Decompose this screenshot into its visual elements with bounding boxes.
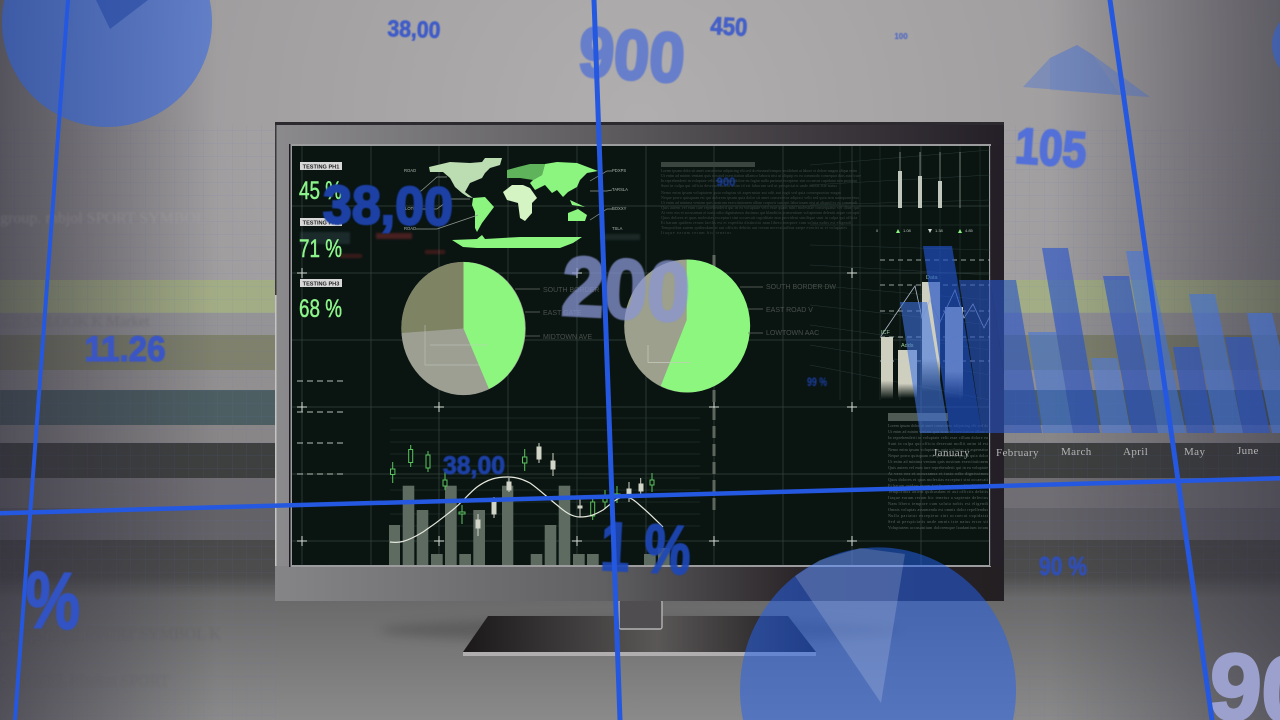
map leader lines xyxy=(416,171,612,229)
text block bottom right: Voluptatem accusantium doloremque laudantium totam xyxy=(888,525,989,530)
right pie leaders and labels: SOUTH BORDER DW xyxy=(766,284,836,291)
floating numbers overlay xyxy=(24,12,1088,646)
number 100 small: 100 xyxy=(894,32,908,41)
testing label 2 xyxy=(300,218,342,226)
text block bottom right: Ut enim ad minim veniam quis nostrud exercitation ullamco xyxy=(888,429,988,434)
overlay month labels: January xyxy=(933,447,970,459)
screen xyxy=(291,145,990,566)
monitor xyxy=(275,122,1004,601)
background floor xyxy=(0,540,1280,720)
top right circle overlay xyxy=(1272,7,1280,83)
testing label 3: TESTING PH3 xyxy=(303,282,339,288)
testing label 2: TESTING PH2 xyxy=(303,220,339,226)
small 900 on screen: 900 xyxy=(716,175,736,189)
candles xyxy=(390,445,654,524)
floor shadow xyxy=(380,618,900,642)
monitor bar chart: Adds xyxy=(901,343,914,349)
faint background text: group. mbjol SPORT SYMBOL xyxy=(0,210,206,227)
gauge legend xyxy=(876,228,974,233)
number 90 percent: 90 % xyxy=(1039,551,1087,581)
text block top: Et harum quidem rerum facilis est et expedita distinctio nam libero tempore cum soluta nobis est eligendi xyxy=(661,220,852,225)
number 105: 105 xyxy=(1014,118,1088,178)
map labels: LOTO xyxy=(405,187,417,192)
overlay month labels: February xyxy=(996,447,1039,459)
background wall xyxy=(0,0,1280,545)
overlay month labels xyxy=(933,445,1259,459)
right pie leaders and labels: EAST ROAD V xyxy=(766,307,813,314)
background data stripes xyxy=(0,280,1280,540)
Antarctica xyxy=(452,235,582,248)
left pie leaders and labels: MIDTOWN AVE xyxy=(543,334,592,341)
small vertical gauges xyxy=(876,152,974,233)
percent 71: 71 % xyxy=(299,235,342,263)
overlay month labels: April xyxy=(1123,446,1148,458)
text block bottom right xyxy=(888,413,989,530)
number 1 percent: 1 % xyxy=(599,508,693,589)
text block bottom right: Neque porro quisquam est qui dolorem ipsum quia dolor xyxy=(888,453,989,458)
trend curve xyxy=(390,477,663,542)
number 11.26: 11.26 xyxy=(84,330,166,369)
gauge legend: 1.08 xyxy=(903,228,912,233)
world map xyxy=(404,158,628,248)
text block top: Sunt in culpa qui officia deserunt mollit anim id est laborum sed ut perspiciatis unde omnis iste natus xyxy=(661,183,837,188)
number 450: 450 xyxy=(710,12,748,42)
candlestick and volume chart xyxy=(389,443,670,565)
right pie leaders and labels: LOWTOWN AAC xyxy=(766,330,819,337)
bottom pie overlay xyxy=(740,547,1016,720)
left pie leaders and labels xyxy=(515,287,599,341)
small 99 percent on screen: 99 % xyxy=(807,375,827,389)
map labels: BOXXY xyxy=(612,206,627,211)
text block bottom right: Ut enim ad minima veniam quis nostrum exercitationem xyxy=(888,459,989,464)
text block bottom right: Quis autem vel eum iure reprehenderit qui in ea voluptate xyxy=(888,465,988,470)
map labels: TARSLA xyxy=(612,187,628,192)
percent 45: 45 % xyxy=(299,177,342,205)
monitor neck xyxy=(619,600,662,629)
text block top: Itaque earum rerum hic tenetur xyxy=(661,230,732,235)
panel: testing percentages xyxy=(299,162,342,323)
faint background text: group. mbjol SPORT SYMBOL K xyxy=(0,626,221,643)
monitor stand xyxy=(380,600,900,656)
text block bottom right: Nam libero tempore cum soluta nobis est eligendi xyxy=(888,501,989,506)
gauge legend: 1.38 xyxy=(935,228,944,233)
overlay month labels: May xyxy=(1184,446,1205,458)
faint background text: SYMBOL Market SPORT xyxy=(0,673,169,690)
North America xyxy=(429,158,502,198)
text block top: Quos dolores et quas molestias excepturi sint occaecati cupiditate non provident similique sunt in culpa qui officia xyxy=(661,215,857,220)
monitor right side darkening xyxy=(990,146,1004,566)
map labels: ROAD xyxy=(404,168,416,173)
text block top: Temporibus autem quibusdam et aut officiis debitis aut rerum necessitatibus saepe eveniet ut et voluptates xyxy=(661,225,847,230)
text block bottom right: Sed ut perspiciatis unde omnis iste natus error sit xyxy=(888,519,989,524)
South America xyxy=(472,197,494,232)
gauge legend: 0 xyxy=(876,228,879,233)
text block heading bar xyxy=(661,162,755,167)
testing label 1: TESTING PH1 xyxy=(303,164,339,170)
percent 68: 68 % xyxy=(299,295,342,323)
top right triangle overlay xyxy=(1023,45,1150,97)
number 900 top: 900 xyxy=(576,12,687,98)
text block top xyxy=(661,162,861,235)
left pie leaders and labels: EAST GATE xyxy=(543,310,582,317)
number 38,00 on screen: 38,00 xyxy=(322,175,453,237)
faint background text: HILLS LOOK K Market xyxy=(0,314,150,330)
text block bottom right: Quos dolores et quas molestias excepturi sint occaecati xyxy=(888,477,989,482)
number 38,00 top: 38,00 xyxy=(387,15,441,43)
testing label 1 xyxy=(300,162,342,170)
monitor bar chart: ICF xyxy=(881,330,890,336)
gauge legend: 4.85 xyxy=(965,228,974,233)
faint background text xyxy=(0,210,221,690)
Africa xyxy=(503,185,537,221)
text block bottom right: Omnis voluptas assumenda est omnis dolor repellendus xyxy=(888,507,988,512)
text block top: In reprehenderit in voluptate velit esse cillum dolore eu fugiat nulla pariatur excepteur sint occaecat cupidatat non proident xyxy=(661,178,858,183)
monitor base xyxy=(463,616,816,652)
text block bottom right: Et harum quidem rerum facilis est et expedita distinctio xyxy=(888,483,988,488)
testing label 3 xyxy=(300,279,342,288)
text block bottom right: At vero eos et accusamus et iusto odio dignissimos xyxy=(888,471,988,476)
text block bottom right: Sunt in culpa qui officia deserunt mollit anim id est xyxy=(888,441,989,446)
text block bottom right: Temporibus autem quibusdam et aut officiis debitis xyxy=(888,489,988,494)
text block top: Quis autem vel eum iure reprehenderit qui in ea voluptate velit esse quam nihil molestiae consequatur vel illum qui xyxy=(661,205,860,210)
Asia xyxy=(530,162,598,197)
screen blurred traffic lights xyxy=(300,232,640,258)
overlay month labels: June xyxy=(1237,445,1259,457)
text block bottom right: Nulla pariatur excepteur sint occaecat cupidatat xyxy=(888,513,989,518)
monitor bar chart: Data xyxy=(926,275,939,281)
text block heading bar xyxy=(888,413,948,421)
text block bottom right: Lorem ipsum dolor sit amet consectetur adipiscing elit sed do xyxy=(888,423,988,428)
text block bottom right: In reprehenderit in voluptate velit esse cillum dolore eu xyxy=(888,435,988,440)
pie chart left xyxy=(401,262,599,395)
text block top: Ut enim ad minima veniam quis nostrum exercitationem ullam corporis suscipit laboriosam nisi ut aliquid ex ea commodi xyxy=(661,200,858,205)
number 200 on screen: 200 xyxy=(560,239,692,339)
map labels: TSLA xyxy=(612,226,623,231)
pie chart right xyxy=(624,259,836,392)
Indonesia xyxy=(570,200,585,207)
left pie leaders and labels: SOUTH BORDER xyxy=(543,287,599,294)
monitor bezel xyxy=(275,122,1004,601)
right pie leaders and labels xyxy=(740,284,836,337)
number 38,00 chart: 38,00 xyxy=(443,452,505,480)
overlay bar chart xyxy=(900,246,1280,433)
percent bottom left: % xyxy=(24,555,82,646)
map labels: PDXPS xyxy=(612,168,626,173)
Australia xyxy=(568,209,587,221)
text block top: Neque porro quisquam est qui dolorem ipsum quia dolor sit amet consectetur adipisci velit sed quia non numquam eius xyxy=(661,195,859,200)
text block top: Ut enim ad minim veniam quis nostrud exercitation ullamco laboris nisi ut aliquip ex ea commodo consequat duis aute irure xyxy=(661,173,861,178)
text block bottom right: Nemo enim ipsam voluptatem quia voluptas sit aspernatur xyxy=(888,447,989,452)
overlay month labels: March xyxy=(1061,446,1092,458)
text block top: Nemo enim ipsam voluptatem quia voluptas sit aspernatur aut odit aut fugit sed quia consequuntur magni xyxy=(661,190,842,195)
map labels xyxy=(404,168,628,231)
crosshair markers xyxy=(297,268,857,546)
dashed scale lines xyxy=(297,255,714,510)
monitor bar chart xyxy=(880,260,990,399)
map labels: ROAD xyxy=(404,226,416,231)
volume bars xyxy=(389,486,670,565)
top left pie overlay xyxy=(2,0,212,127)
text block top: Lorem ipsum dolor sit amet consectetur adipiscing elit sed do eiusmod tempor incididunt ut labore et dolore magna aliqua enim xyxy=(661,168,858,173)
screen grid xyxy=(292,146,990,566)
map labels: LOTO xyxy=(405,206,417,211)
text block bottom right: Itaque earum rerum hic tenetur a sapiente delectus xyxy=(888,495,988,500)
Europe xyxy=(507,164,545,180)
text block top: At vero eos et accusamus et iusto odio dignissimos ducimus qui blanditiis praesentium voluptatum deleniti atque corrupti xyxy=(661,210,860,215)
